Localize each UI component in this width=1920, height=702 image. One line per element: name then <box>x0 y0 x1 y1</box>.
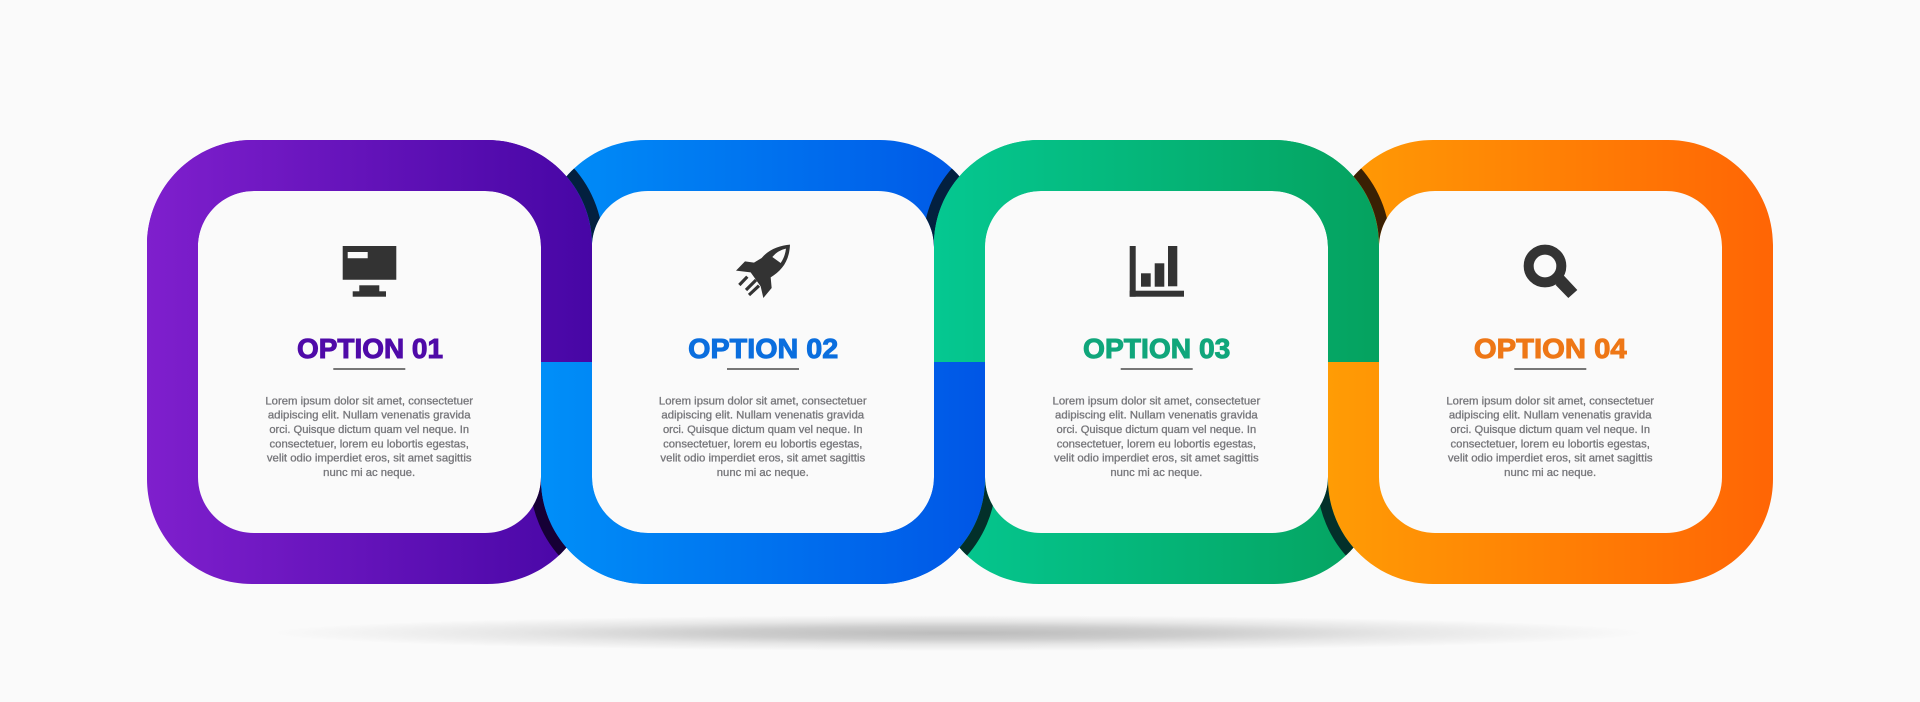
body text: orci. Quisque dictum quam vel neque. In <box>269 424 469 436</box>
body text: nunc mi ac neque. <box>323 467 415 479</box>
body text: consectetuer, lorem eu lobortis egestas, <box>270 438 469 450</box>
body text: Lorem ipsum dolor sit amet, consectetuer <box>659 395 867 407</box>
floor shadow <box>270 615 1646 651</box>
body text: consectetuer, lorem eu lobortis egestas, <box>1057 438 1256 450</box>
body text: adipiscing elit. Nullam venenatis gravida <box>268 410 471 422</box>
icon: rocket <box>736 245 790 298</box>
body text: orci. Quisque dictum quam vel neque. In <box>663 424 863 436</box>
icon: magnifying glass <box>1529 250 1577 298</box>
body text: adipiscing elit. Nullam venenatis gravida <box>661 410 865 422</box>
heading: option 04: OPTION 04 <box>1474 333 1627 364</box>
body text: velit odio imperdiet eros, sit amet sagittis <box>1448 453 1653 465</box>
ring: option 03 <box>934 140 1379 584</box>
body text <box>265 395 473 479</box>
body text: velit odio imperdiet eros, sit amet sagittis <box>267 453 472 465</box>
body text <box>1446 395 1654 479</box>
body text: orci. Quisque dictum quam vel neque. In <box>1450 424 1650 436</box>
body text: orci. Quisque dictum quam vel neque. In <box>1057 424 1256 436</box>
ring: option 04 <box>1328 140 1773 584</box>
overlap shadow: ring 3 on ring 2 <box>926 168 960 246</box>
body text: consectetuer, lorem eu lobortis egestas, <box>1451 438 1650 450</box>
underline <box>727 368 799 370</box>
overlap shadow: ring 2 on ring 1 <box>533 478 566 556</box>
body text: Lorem ipsum dolor sit amet, consectetuer <box>1446 395 1654 407</box>
panel: option 02 <box>659 245 867 479</box>
body text: nunc mi ac neque. <box>1110 467 1202 479</box>
ring 1 upper half over ring 2 <box>147 140 592 362</box>
body text: Lorem ipsum dolor sit amet, consectetuer <box>265 395 473 407</box>
panel: option 04 <box>1446 250 1654 479</box>
overlap shadow: ring 1 on ring 2 <box>566 168 600 244</box>
underline <box>1121 368 1193 370</box>
panel: option 03 <box>1053 246 1261 479</box>
body text: adipiscing elit. Nullam venenatis gravida <box>1055 410 1259 422</box>
underline <box>333 368 405 370</box>
ring: option 02 <box>541 140 985 584</box>
body text <box>659 395 867 479</box>
underline <box>1514 368 1586 370</box>
heading: option 03: OPTION 03 <box>1083 333 1230 364</box>
body text: Lorem ipsum dolor sit amet, consectetuer <box>1053 395 1261 407</box>
icon: bar chart <box>1130 246 1184 297</box>
ring 3 upper half over ring 4 <box>934 140 1379 362</box>
heading: option 02: OPTION 02 <box>688 333 838 364</box>
heading: option 01: OPTION 01 <box>297 333 443 364</box>
body text: velit odio imperdiet eros, sit amet sagittis <box>1054 453 1259 465</box>
panel: option 01 <box>265 246 473 479</box>
body text: velit odio imperdiet eros, sit amet sagittis <box>660 453 866 465</box>
body text <box>1053 395 1261 479</box>
body text: consectetuer, lorem eu lobortis egestas, <box>663 438 862 450</box>
icon: monitor <box>343 246 396 297</box>
body text: adipiscing elit. Nullam venenatis gravida <box>1449 410 1652 422</box>
overlap shadow: ring 3 on ring 4 <box>1354 168 1387 245</box>
overlap shadow: ring 2 on ring 3 <box>960 478 993 556</box>
body text: nunc mi ac neque. <box>1504 467 1596 479</box>
body text: nunc mi ac neque. <box>717 467 809 479</box>
ring: option 01 <box>147 140 592 584</box>
ring 2 lower half over ring 3 <box>541 362 985 584</box>
overlap shadow: ring 4 on ring 3 <box>1320 478 1354 556</box>
